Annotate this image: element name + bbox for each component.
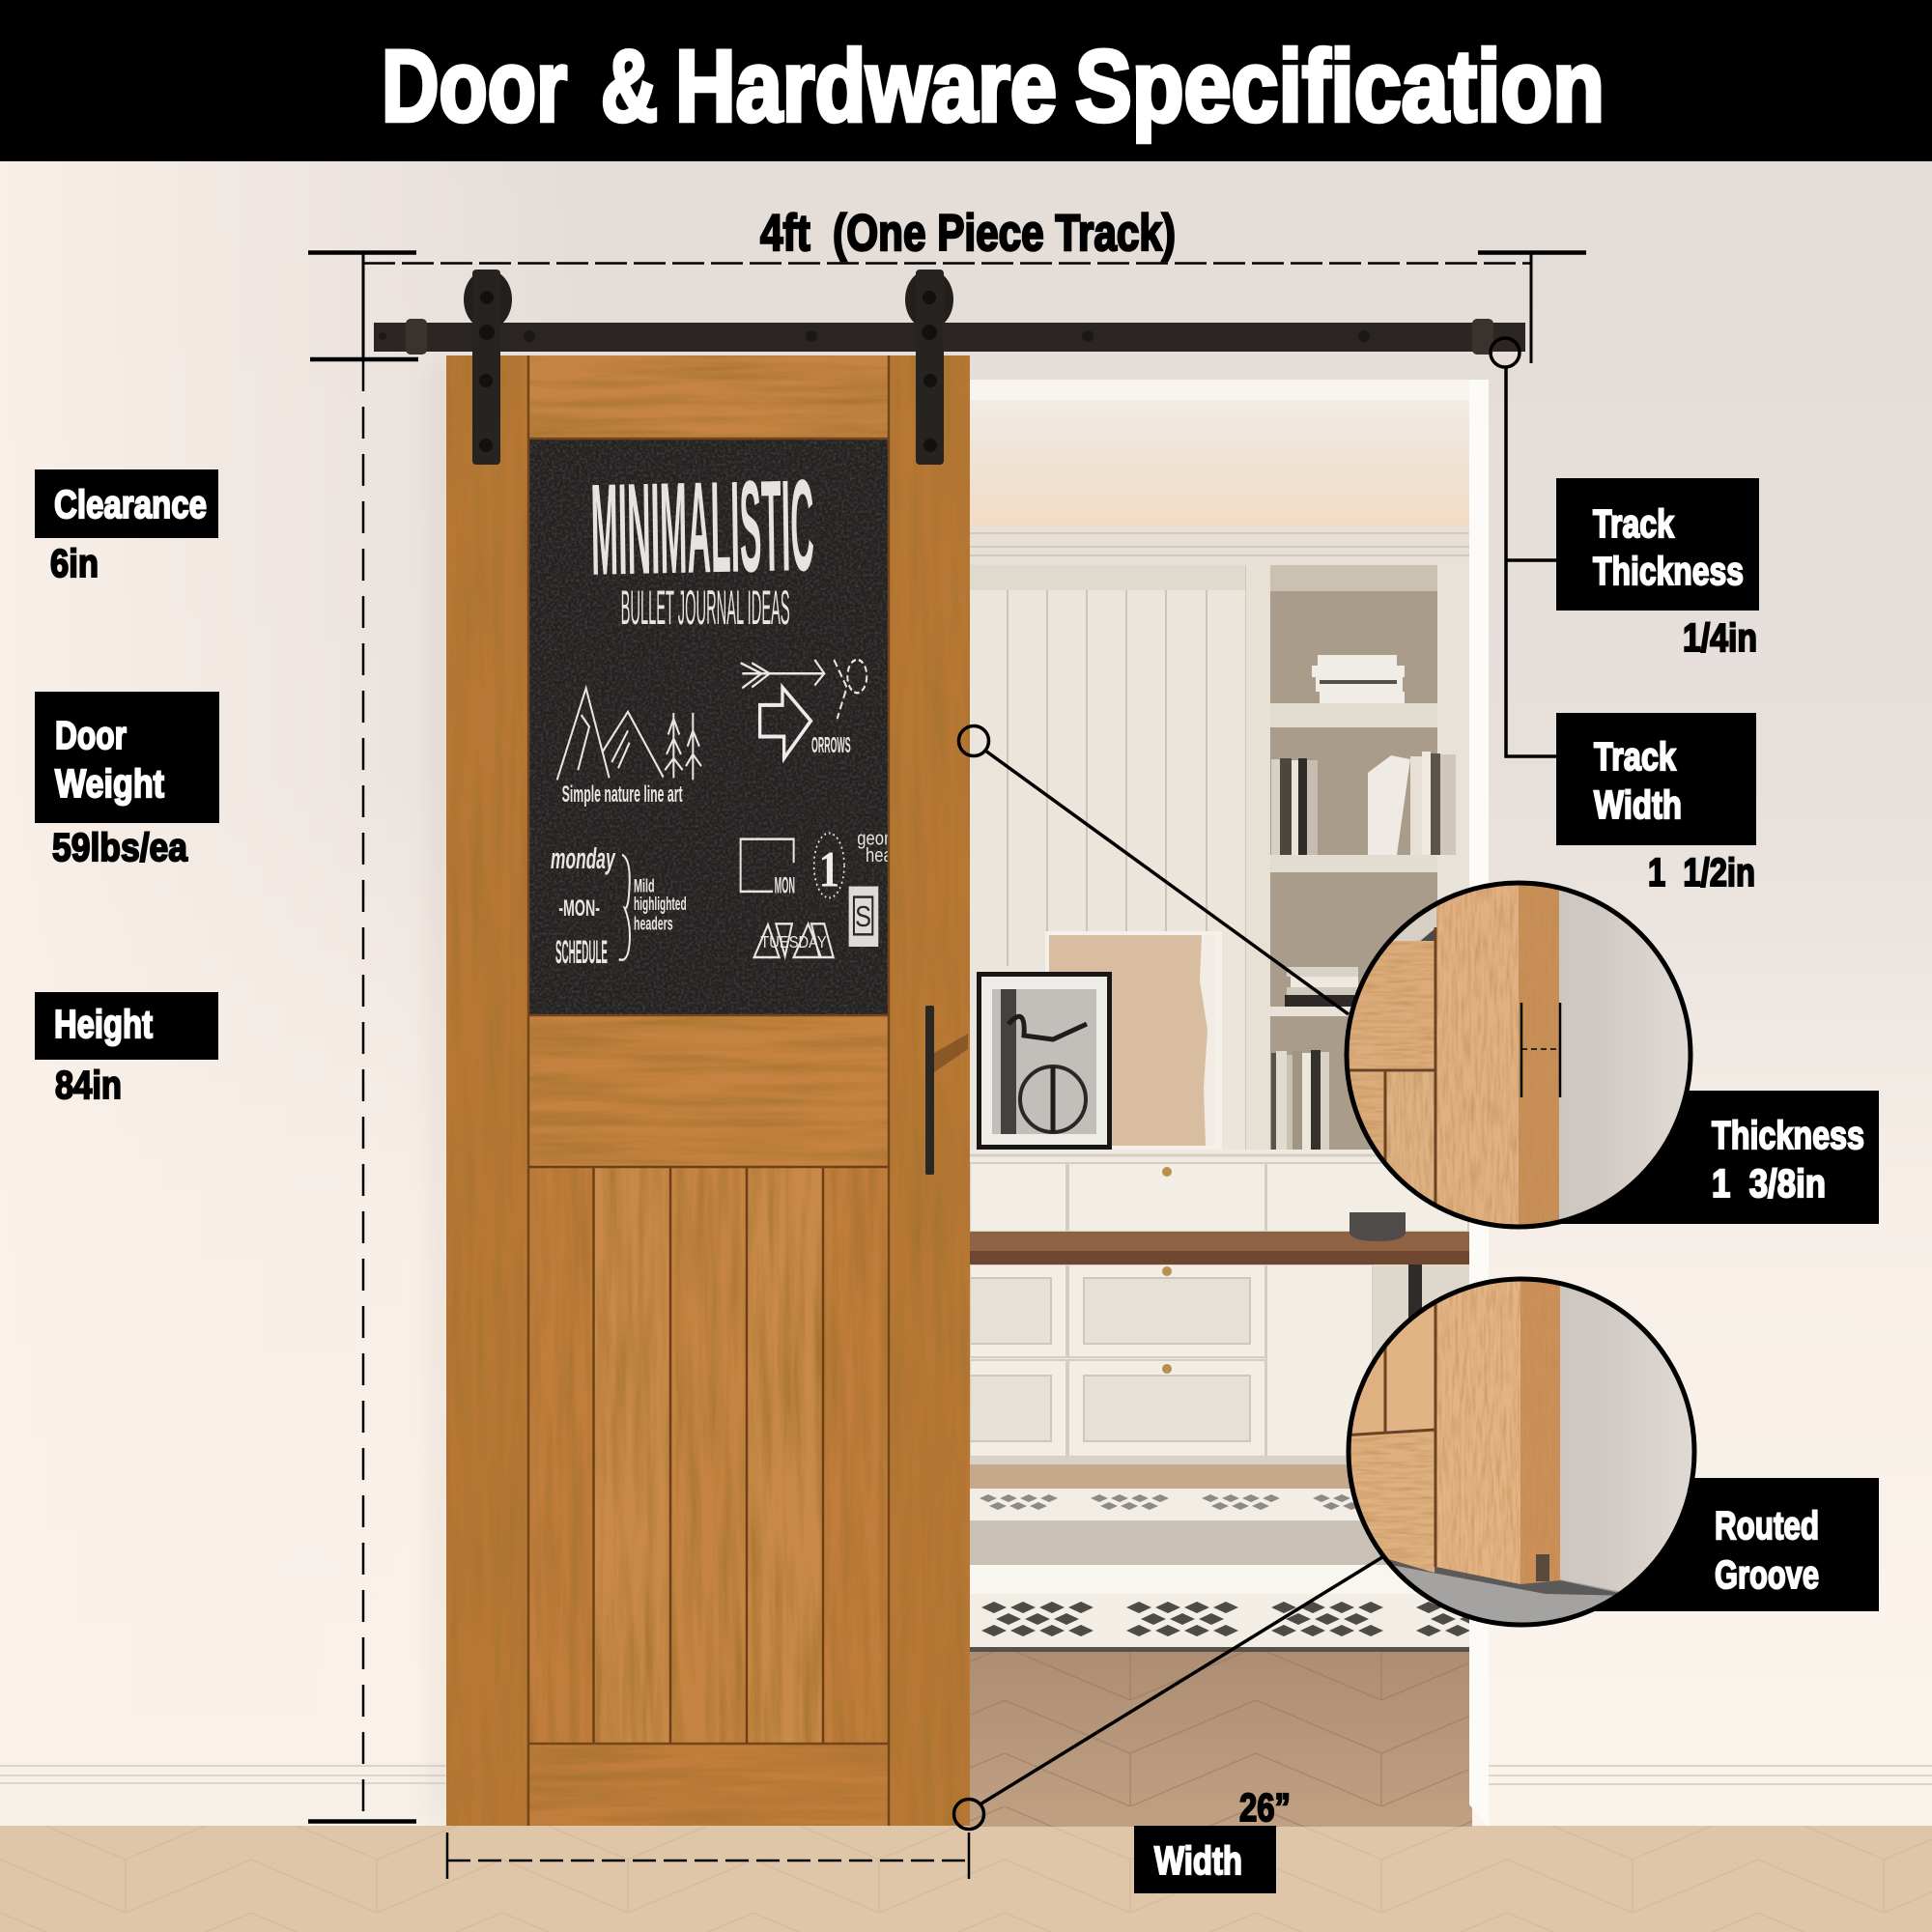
geometric headers caption: headers [866,843,923,866]
barn door: MINIMALISTIC [590,453,815,603]
title [382,30,1605,143]
height label [35,992,218,1107]
tuesday bunting [754,923,834,957]
chalk lettering: SCHEDULE [555,933,608,971]
thickness label text [1712,1113,1864,1206]
bicycle photo frame [977,972,1112,1150]
books bottom [1271,1050,1329,1151]
barn door [446,355,970,1826]
clearance label: Clearance [54,482,207,526]
title: Specification [1075,30,1605,143]
leader to thickness detail [958,726,1349,1014]
door weight value: 59lbs/ea [52,825,188,869]
track thickness label: Track [1593,501,1674,546]
leader to groove detail [954,1557,1382,1830]
door seams [528,355,889,1826]
middle rail [528,1015,889,1167]
door width dimension [447,1833,969,1879]
curly brace [619,855,630,960]
left stile [446,355,528,1826]
track thickness label: Thickness [1593,549,1744,593]
nature caption: Simple nature line art [562,781,683,807]
width label [1134,1785,1291,1893]
chalk lettering: BULLET JOURNAL IDEAS [621,581,790,635]
s badge [849,887,878,947]
magnifier: door thickness [1343,879,1695,1236]
bottom rail [528,1744,889,1826]
width label: Width [1154,1838,1242,1883]
door weight label: Door [55,713,127,757]
door pull handle [925,1006,968,1175]
chalk lettering: MON [775,872,795,898]
routed groove label text [1715,1503,1819,1597]
track length label: 4ft (One Piece Track) [760,205,1176,262]
room seen through doorway [970,380,1489,1827]
title: Hardware [675,30,1057,143]
door height dimension [308,359,416,1822]
mild highlighted headers: highlighted [634,894,687,914]
floor [0,1826,1932,1932]
vertical plank panels [528,1167,889,1744]
cup on desk [1350,1212,1406,1241]
track thickness value: 1/4in [1683,615,1757,660]
chalk lettering: ORROWS [811,733,851,757]
baseboard left [0,1762,446,1826]
mild highlighted headers: headers [634,913,673,934]
left hanger [464,270,512,465]
s badge: S [855,898,871,932]
mountain line art [557,688,664,780]
dashed circle [847,660,867,693]
numbered circle [814,833,844,898]
chalk lettering [551,479,888,964]
clearance label [35,469,218,585]
width value: 26” [1239,1785,1291,1830]
ceiling glow [970,400,1470,526]
track width value: 1 1/2in [1648,850,1755,895]
panelled wall [970,565,1250,1154]
mild highlighted headers [634,879,686,929]
title bar [0,0,1932,161]
baseboard right [1489,1760,1932,1827]
thickness label text: Thickness [1712,1113,1864,1157]
left track stop [406,319,427,355]
cabinets [970,1150,1470,1464]
track width label [1556,713,1756,895]
track width label: Width [1594,782,1682,827]
room floor and rug [970,1457,1472,1827]
mon box [741,839,794,892]
geometric headers caption [858,835,888,862]
dashed circle arrow [834,660,847,719]
track length dimension [308,252,1586,363]
tuesday bunting: TUESDAY [760,932,827,952]
thickness label box [1546,1091,1879,1224]
large abstract art frame [1045,931,1222,1150]
desk top [970,1232,1470,1264]
title: Door [382,30,567,143]
top rail [528,355,889,439]
track thickness label [1556,478,1759,660]
door jamb [1469,380,1489,1827]
books middle [1271,752,1456,855]
block arrow [760,688,810,758]
geometric headers caption: geometric [857,827,927,849]
chalkboard window [529,440,888,1014]
monday: monday [551,841,615,875]
right hanger [905,270,953,465]
routed groove label text: Groove [1715,1552,1819,1597]
pine trees [665,713,701,780]
crown moulding [970,526,1470,565]
feather arrow [741,660,824,688]
mon divider: -MON- [558,895,600,922]
books lower [1285,967,1362,1007]
door weight label [35,692,219,869]
door weight label: Weight [55,761,164,806]
bookcase [1246,565,1470,1154]
routed groove label box [1546,1478,1879,1611]
height label: Height [54,1002,153,1046]
clearance value: 6in [50,541,99,585]
routed groove label text: Routed [1715,1503,1819,1548]
numbered circle: 1 [818,842,839,898]
magnifier: routed groove [1343,1275,1700,1633]
title: & [601,30,658,143]
right stile [889,355,970,1826]
height value: 84in [55,1063,122,1107]
books top stack [1312,655,1405,703]
track leader lines [1491,338,1556,756]
track width label: Track [1594,734,1676,779]
door shadow on wall [433,367,448,1826]
sliding track [374,319,1525,355]
right track stop [1472,319,1493,355]
mild highlighted headers: Mild [634,875,655,896]
thickness label text: 1 3/8in [1712,1161,1826,1206]
